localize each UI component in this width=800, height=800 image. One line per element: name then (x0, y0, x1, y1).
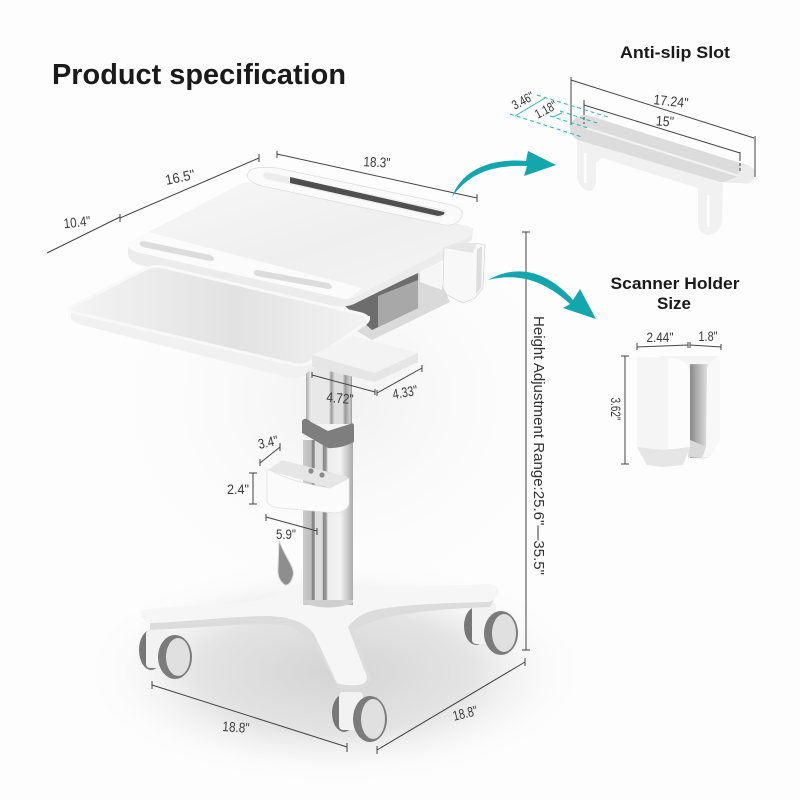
tray top (128, 183, 473, 299)
dimension: 16.5 inch (120, 154, 259, 222)
right wing (702, 356, 720, 458)
dimension: base right 18.8 inch (377, 658, 525, 754)
icon: cable loop (278, 540, 293, 585)
bracket and legs (577, 138, 723, 235)
dimension: 15 inch (584, 100, 740, 172)
dimension: 4.33 inch: 4.33" (391, 382, 419, 402)
dimension: height adjustment range (522, 232, 546, 650)
plate (570, 115, 755, 183)
heading: scanner holder size: Size (657, 294, 691, 313)
right caster (464, 602, 518, 655)
leg slots (584, 153, 586, 183)
dimension: 3.62 inch (608, 356, 629, 464)
icon: anti-slip slot bracket (570, 115, 755, 235)
front shell (637, 357, 690, 467)
base top surface (141, 584, 498, 685)
tray lip (128, 228, 473, 306)
dimension: 1.8 inch (690, 328, 721, 350)
dimension: height adjustment range: Height Adjustment Range:25.6"—35.5" (530, 316, 546, 575)
front caster (332, 692, 387, 742)
dimension: 2.4 inch (227, 473, 257, 504)
dimension: 2.44 inch (637, 329, 688, 350)
title: Product specification (52, 59, 346, 91)
dimension: 1.18 inch: 1.18" (532, 97, 560, 122)
dimension: 3.4 inch: 3.4" (257, 432, 279, 452)
icon: base with casters (139, 584, 518, 742)
collar (302, 419, 354, 448)
dimension: 17.24 inch (571, 77, 755, 177)
dimension: 10.4 inch (47, 213, 120, 253)
icon: storage basket (267, 460, 349, 513)
inner gap (690, 364, 708, 458)
icon: mouse tray (312, 336, 418, 382)
heading: anti-slip slot: Anti-slip Slot (620, 43, 730, 62)
dimension: 1.8 inch: 1.8" (698, 328, 718, 344)
icon: scanner holder (637, 356, 720, 467)
dimension: 16.5 inch: 16.5" (164, 166, 196, 188)
dimension: 4.72 inch (312, 372, 375, 407)
hand slots (140, 242, 213, 260)
front strip (128, 232, 362, 299)
base underside (150, 592, 498, 690)
plate end (725, 165, 755, 183)
shell bottom (637, 447, 690, 467)
icon: column (302, 368, 354, 608)
slot opening (586, 128, 741, 176)
scanner holder on tray (443, 243, 485, 303)
under-tray box (345, 272, 450, 340)
arrow: tray slot to anti-slip detail (452, 151, 556, 197)
dimension: 3.46 inch: 3.46" (509, 88, 537, 113)
dimension: 4.33 inch (377, 365, 422, 402)
tablet slot plate (247, 167, 462, 225)
dimension: 3.62 inch: 3.62" (608, 398, 624, 421)
dimension: 2.44 inch: 2.44" (646, 329, 674, 345)
dimension: 4.72 inch: 4.72" (326, 389, 354, 407)
dimension: 3.46 inch (509, 88, 608, 137)
dimension: base left 18.8 inch (152, 681, 347, 752)
back plate (660, 356, 720, 460)
dimension: 10.4 inch: 10.4" (63, 213, 91, 231)
mechanism shadows (208, 280, 325, 308)
dimension: base left 18.8 inch: 18.8" (222, 718, 250, 736)
dimension: 18.3 inch: 18.3" (363, 153, 391, 171)
left caster (139, 630, 192, 679)
dimension: base right 18.8 inch: 18.8" (451, 702, 479, 724)
dimension: 2.4 inch: 2.4" (227, 481, 249, 497)
dimension: 5.9 inch (266, 514, 317, 542)
heading: scanner holder size: Scanner Holder (610, 274, 740, 293)
dimension: 17.24 inch: 17.24" (653, 91, 689, 111)
icon: keyboard tray (70, 266, 370, 378)
icon: upper tray assembly (128, 167, 485, 340)
dimension: 1.18 inch (532, 97, 597, 128)
heading: scanner holder size (610, 274, 740, 313)
arrow: holder to scanner detail (488, 271, 596, 319)
dimension: 18.3 inch (277, 151, 477, 202)
dimension: 15 inch: 15" (655, 112, 675, 130)
dimension: 3.4 inch (257, 432, 280, 466)
dimension: 5.9 inch: 5.9" (276, 526, 296, 542)
